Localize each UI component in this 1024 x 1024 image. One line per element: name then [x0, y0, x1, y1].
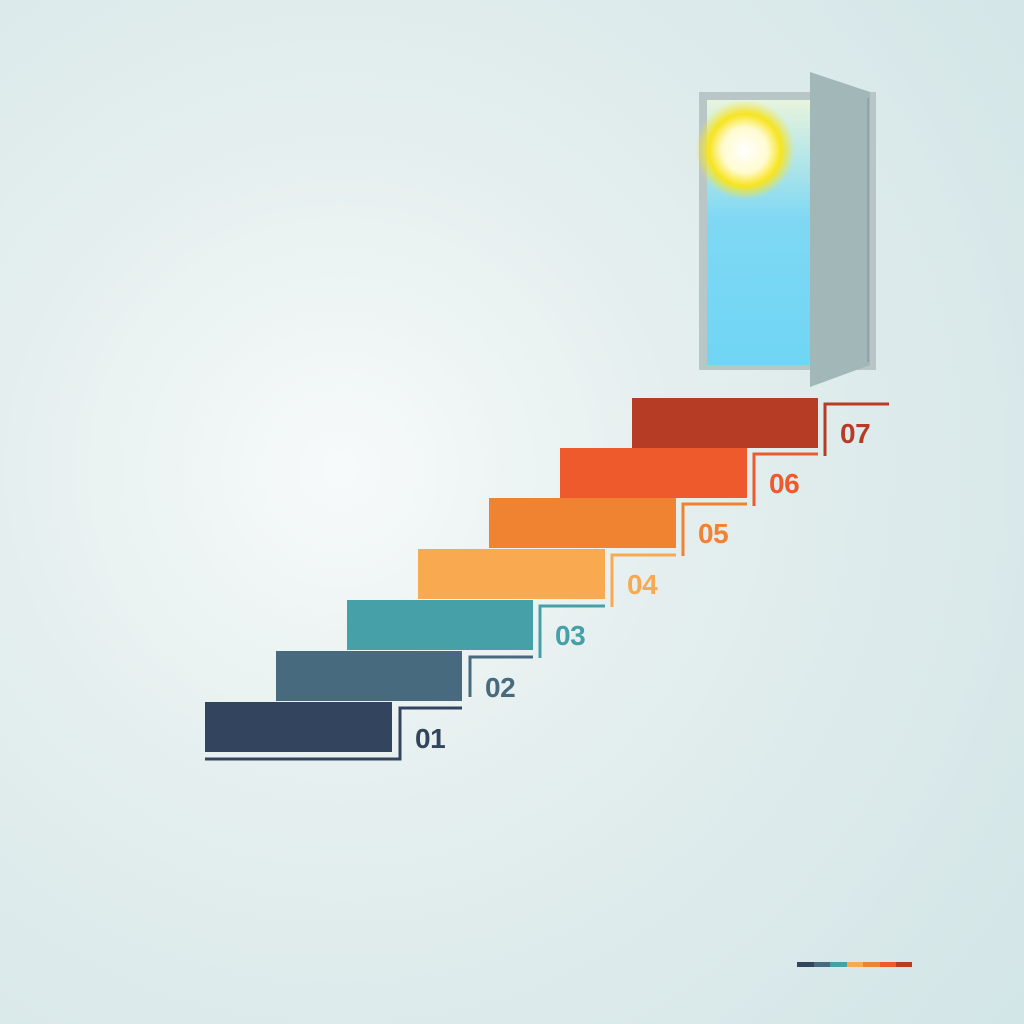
colour legend bar: [797, 962, 912, 967]
step 01: 01: [415, 723, 445, 754]
step 07: [632, 398, 889, 456]
step 01: [205, 702, 462, 759]
step 03: 03: [555, 620, 585, 651]
step 06: [560, 448, 818, 506]
step 06: 06: [769, 468, 799, 499]
step 07: 07: [840, 418, 870, 449]
step 02: [276, 651, 533, 703]
door: [695, 72, 876, 387]
icon: sun: [695, 100, 795, 200]
door panel: [810, 72, 870, 387]
step 03: [347, 600, 605, 658]
step 05: 05: [698, 518, 728, 549]
step 04: 04: [627, 569, 658, 600]
step 02: 02: [485, 672, 515, 703]
step 04: [418, 549, 676, 607]
step 05: [489, 498, 747, 556]
